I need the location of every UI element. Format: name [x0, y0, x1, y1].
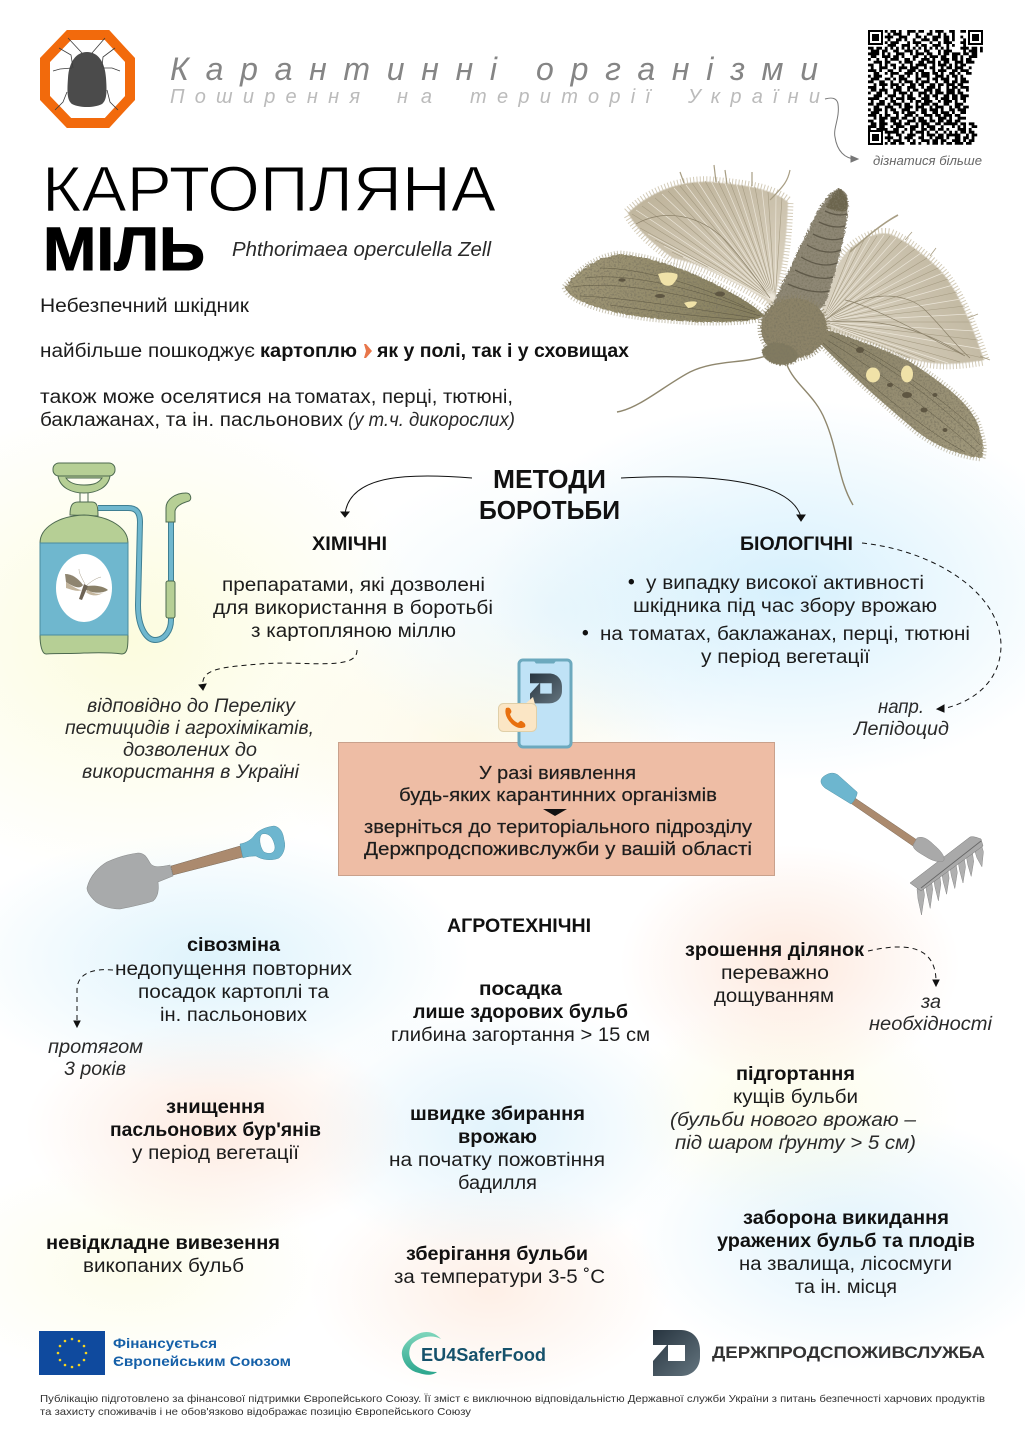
moth hind wing right — [820, 215, 990, 364]
QR code — [868, 30, 983, 145]
item: irrigation: зрошення ділянок — [685, 940, 865, 961]
item: weed destruction: у період вегетації — [132, 1143, 300, 1164]
arrow: chemical dashed — [199, 650, 357, 690]
logo: quarantine beetle octagon — [45, 35, 130, 123]
logo: state service — [653, 1330, 985, 1376]
panel: report callout: Держпродспоживслужби у вашій області — [364, 838, 752, 859]
item: dumping ban: уражених бульб та плодів — [717, 1231, 975, 1252]
heading: chemical: ХІМІЧНІ — [312, 534, 387, 555]
text: chemical methods — [213, 575, 493, 642]
note: three years: протягом — [48, 1037, 143, 1058]
heading: agrotechnical: АГРОТЕХНІЧНІ — [447, 916, 591, 937]
moth hind wing left — [628, 165, 790, 305]
item: removal: викопаних бульб — [83, 1256, 244, 1277]
text: biological methods: • — [582, 623, 589, 644]
item: crop rotation: сівозміна — [187, 935, 280, 956]
main title: КАРТОПЛЯНА — [42, 153, 496, 225]
text: funded by EU: Європейським Союзом — [113, 1353, 291, 1369]
logo: EU4SaferFood — [402, 1332, 546, 1375]
intro text: картоплю — [260, 341, 357, 362]
disclaimer — [40, 1393, 985, 1418]
item: crop rotation: посадок картоплі та — [138, 982, 329, 1003]
arrow: to biological — [621, 477, 805, 521]
note: lepidocid — [852, 697, 949, 740]
intro text: найбільше пошкоджує — [40, 341, 255, 362]
text: biological methods — [582, 572, 970, 668]
item: weed destruction: пасльонових бур'янів — [110, 1120, 321, 1141]
note: list of pesticides — [65, 696, 314, 783]
moth fore wing left — [565, 254, 764, 322]
note: lepidocid: Лепідоцид — [852, 719, 949, 740]
heading: methods: БОРОТЬБИ — [479, 495, 620, 525]
text: biological methods: у випадку високої активності — [646, 573, 924, 594]
intro text: баклажанах, та ін. пасльонових — [40, 410, 344, 431]
item: fast harvest: на початку пожовтіння — [389, 1150, 605, 1171]
item: hilling: (бульби нового врожаю – — [670, 1110, 916, 1131]
disclaimer: та захисту споживачів і не обов'язково відображає позицію Європейського Союзу — [40, 1406, 472, 1418]
item: dumping ban — [717, 1208, 975, 1298]
item: weed destruction: знищення — [166, 1097, 265, 1118]
note: list of pesticides: відповідно до Переліку — [87, 696, 297, 717]
intro text: томатах, перці, тютюні, — [295, 387, 513, 408]
heading: methods: МЕТОДИ — [493, 464, 606, 494]
note: list of pesticides: дозволених до — [123, 740, 257, 761]
QR caption: дізнатися більше — [873, 154, 982, 168]
panel: report callout: зверніться до територіального підрозділу — [364, 816, 753, 837]
text: funded by EU: Фінансується — [113, 1335, 217, 1351]
item: hilling: підгортання — [736, 1064, 855, 1085]
item: planting: лише здорових бульб — [413, 1002, 628, 1023]
item: removal: невідкладне вивезення — [46, 1233, 280, 1254]
icon: rake — [821, 773, 983, 915]
item: fast harvest — [389, 1104, 605, 1194]
logo: state service: ДЕРЖПРОДСПОЖИВСЛУЖБА — [712, 1343, 985, 1362]
panel: report callout: будь-яких карантинних організмів — [399, 784, 717, 805]
logo: EU4SaferFood: EU4SaferFood — [421, 1345, 546, 1365]
item: hilling — [670, 1064, 916, 1154]
item: fast harvest: бадилля — [458, 1173, 537, 1194]
item: storage — [394, 1244, 605, 1288]
icon: shovel — [87, 826, 285, 909]
item: crop rotation: недопущення повторних — [115, 959, 353, 980]
header subtitle: Поширення — [170, 86, 360, 108]
header subtitle: території — [470, 86, 653, 108]
header title: Карантинні — [170, 51, 498, 87]
note: if necessary: за — [920, 992, 941, 1013]
intro text: також може оселятися на — [40, 387, 291, 408]
item: planting — [391, 979, 650, 1046]
moth wing markings — [618, 272, 948, 432]
arrow: irrigation dashed — [868, 947, 939, 986]
item: crop rotation — [115, 935, 353, 1026]
moth illustration — [565, 165, 990, 505]
header title: організми — [536, 51, 818, 87]
note: if necessary — [869, 992, 993, 1035]
header subtitle: на — [397, 86, 432, 108]
note: lepidocid: напр. — [878, 697, 924, 718]
intro text: (у т.ч. дикорослих) — [348, 410, 515, 431]
item: storage: за температури 3-5 ˚С — [394, 1267, 605, 1288]
heading: methods — [479, 464, 620, 525]
note: three years — [48, 1037, 143, 1080]
item: planting: посадка — [479, 979, 562, 1000]
item: dumping ban: та ін. місця — [795, 1277, 897, 1298]
panel: report callout: У разі виявлення — [479, 762, 636, 783]
header subtitle — [170, 86, 820, 108]
latin name: Phthorimaea operculella Zell — [232, 239, 492, 261]
item: weed destruction — [110, 1097, 321, 1164]
item: fast harvest: швидке збирання — [410, 1104, 585, 1125]
text: biological methods: у період вегетації — [701, 647, 871, 668]
text: chemical methods: препаратами, які дозволені — [222, 575, 485, 596]
moth head — [760, 340, 800, 368]
arrow: to chemical — [341, 476, 472, 517]
arrow: subtitle to QR link — [825, 98, 858, 162]
icon: service logo on phone — [530, 674, 562, 703]
moth thorax — [761, 298, 827, 358]
item: hilling: кущів бульби — [733, 1087, 858, 1108]
header subtitle: України — [687, 86, 820, 108]
item: irrigation: дощуванням — [714, 986, 834, 1007]
text: biological methods: на томатах, баклажанах, перці, тютюні — [600, 624, 970, 645]
item: irrigation — [685, 940, 865, 1007]
logo: EU flag — [39, 1331, 105, 1375]
text: chemical methods: з картопляною міллю — [251, 621, 456, 642]
item: planting: глибина загортання > 15 см — [391, 1025, 650, 1046]
moth abdomen — [773, 188, 849, 312]
moth fore wing right — [813, 331, 983, 458]
item: crop rotation: ін. пасльонових — [160, 1005, 308, 1026]
intro text: як у полі, так і у сховищах — [376, 341, 629, 362]
note: if necessary: необхідності — [869, 1014, 993, 1035]
icon: small moth on sprayer — [65, 569, 108, 600]
disclaimer: Публікацію підготовлено за фінансової підтримки Європейського Союзу. Її зміст є виключною відповідальністю Державної служби України з питань безпечності харчових продуктів — [40, 1393, 985, 1405]
icon: sprayer — [40, 463, 191, 654]
text: chemical methods: для використання в боротьбі — [213, 598, 493, 619]
arrow: biological dashed — [862, 543, 1001, 712]
intro text — [40, 296, 629, 431]
arrow: rotation dashed — [74, 970, 113, 1027]
item: fast harvest: врожаю — [458, 1127, 537, 1148]
item: dumping ban: на звалища, лісосмуги — [739, 1254, 952, 1275]
panel: report callout — [338, 742, 774, 876]
text: biological methods: • — [628, 572, 635, 593]
item: hilling: під шаром ґрунту > 5 см) — [675, 1133, 916, 1154]
intro text: Небезпечний шкідник — [40, 296, 250, 317]
note: list of pesticides: використання в Україні — [82, 762, 300, 783]
note: three years: 3 років — [64, 1059, 126, 1080]
item: irrigation: переважно — [721, 963, 829, 984]
icon: phone with call bubble — [498, 660, 571, 747]
text: funded by EU — [113, 1335, 291, 1369]
moth antennae — [617, 356, 853, 505]
main title bold: МІЛЬ — [43, 215, 205, 283]
item: storage: зберігання бульби — [406, 1244, 588, 1265]
item: removal — [46, 1233, 280, 1277]
text: biological methods: шкідника під час збору врожаю — [633, 596, 937, 617]
note: list of pesticides: пестицидів і агрохімікатів, — [65, 718, 314, 739]
item: dumping ban: заборона викидання — [743, 1208, 949, 1229]
heading: biological: БІОЛОГІЧНІ — [740, 534, 853, 555]
header title — [170, 51, 818, 87]
